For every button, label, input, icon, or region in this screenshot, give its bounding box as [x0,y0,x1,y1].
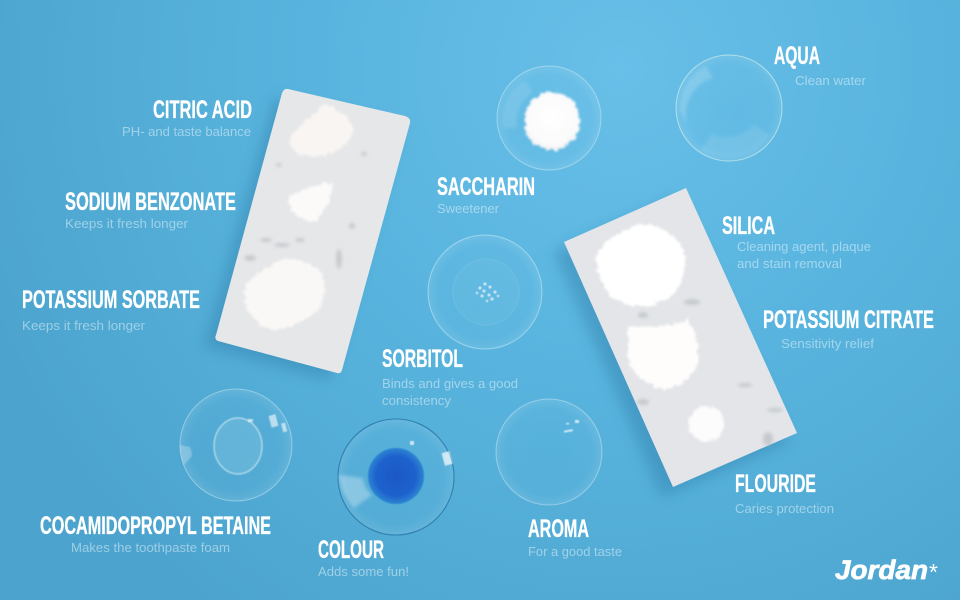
label: sorbitol: consistency [382,393,452,408]
label: silica [722,212,871,271]
pile: saccharin powder [524,92,580,150]
pile: silica [597,224,685,306]
label: silica: SILICA [722,212,775,240]
crystals: sorbitol [476,282,499,302]
droplet: betaine [214,418,262,474]
dish: cocamidopropyl betaine [180,389,292,501]
dish: aqua [676,55,782,161]
label: aqua [774,42,867,88]
label: silica: and stain removal [737,256,842,271]
label: cocamidopropyl betaine: COCAMIDOPROPYL BETAINE [40,512,271,540]
dish: sorbitol [428,235,542,349]
label: citric acid: CITRIC ACID [153,96,252,124]
label: potassium citrate: Sensitivity relief [781,336,874,351]
label: aqua: AQUA [774,42,820,70]
label: aroma: AROMA [528,515,589,543]
label: potassium sorbate: POTASSIUM SORBATE [22,286,200,314]
label: citric acid [122,96,252,139]
pile: potassium citrate [628,320,699,390]
label: sodium benzonate [65,188,236,231]
dish: colour [338,419,454,535]
label: sorbitol: Binds and gives a good [382,376,518,391]
label: potassium sorbate: Keeps it fresh longer [22,318,146,333]
label: aroma: For a good taste [528,544,622,559]
logo: Jordan: * [928,559,938,585]
marble slab: left [205,89,410,380]
label: saccharin [437,173,535,216]
label: aqua: Clean water [795,73,867,88]
label: sorbitol [382,345,518,408]
pile: citric acid [290,104,353,157]
label: citric acid: PH- and taste balance [122,124,251,139]
label: cocamidopropyl betaine: Makes the toothpaste foam [71,540,230,555]
pile: flouride [688,406,724,442]
marble slab: right [554,188,797,497]
label: potassium citrate [763,306,934,351]
label: colour: COLOUR [318,536,384,564]
label: sodium benzonate: Keeps it fresh longer [65,216,189,231]
label: cocamidopropyl betaine [40,512,271,555]
label: saccharin: Sweetener [437,201,500,216]
label: colour: Adds some fun! [318,564,409,579]
label: potassium sorbate [22,286,200,333]
dish: saccharin [497,66,601,170]
label: saccharin: SACCHARIN [437,173,535,201]
label: flouride [735,470,834,516]
label: flouride: FLOURIDE [735,470,816,498]
label: flouride: Caries protection [735,501,834,516]
label: silica: Cleaning agent, plaque [737,239,871,254]
label: colour [318,536,409,579]
logo: Jordan: Jordan [835,555,928,585]
blue liquid [368,448,424,504]
dish: aroma [496,399,602,505]
pile: potassium sorbate [244,259,324,329]
label: aroma [528,515,622,559]
label: sodium benzonate: SODIUM BENZONATE [65,188,236,216]
pile: sodium benzonate [287,182,333,221]
label: sorbitol: SORBITOL [382,345,463,373]
